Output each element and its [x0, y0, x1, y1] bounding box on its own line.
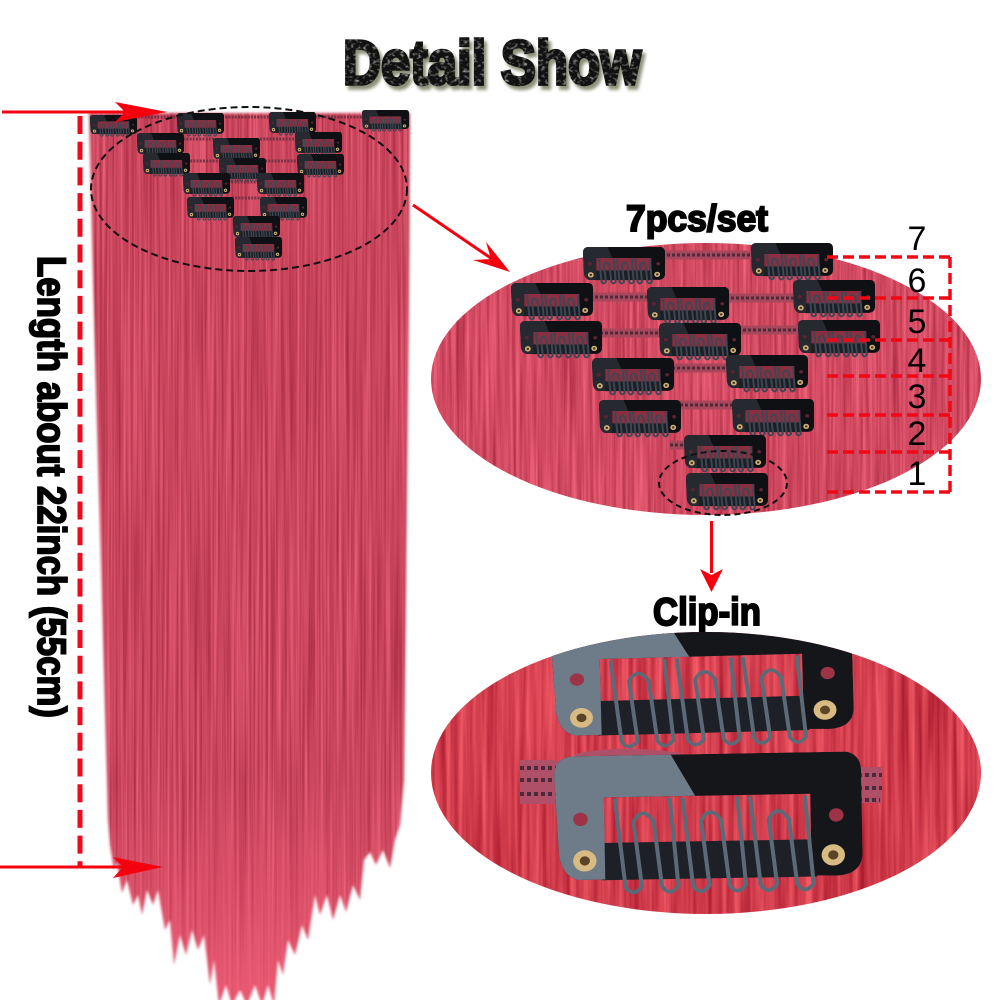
- weft stitching rows: [573, 250, 838, 450]
- length label: Length about 22inch (55cm): [29, 256, 73, 718]
- lower clip: [554, 751, 863, 894]
- heading 7pcs/set: 7pcs/set: [626, 198, 768, 239]
- layer numbers: 5: [908, 303, 926, 341]
- weft stitching on main hair: [135, 117, 362, 198]
- panel: 7 pieces detail ellipse: [425, 238, 990, 520]
- title: Detail Show: [346, 33, 645, 102]
- layer numbers: [908, 220, 926, 493]
- layer numbers: 7: [908, 220, 926, 258]
- top red arrow: [2, 102, 167, 122]
- bottom red arrow: [0, 857, 163, 878]
- dashed ellipse highlighting clips: [91, 107, 407, 271]
- layer numbers: 6: [908, 262, 926, 300]
- numbered layer bracket: [827, 257, 950, 492]
- clips in detail: [511, 243, 880, 509]
- upper clip: [552, 632, 854, 748]
- arrow down to clip-in detail: [700, 521, 723, 592]
- layer numbers: 1: [908, 455, 926, 493]
- layer numbers: 2: [908, 415, 926, 453]
- layer numbers: 3: [908, 378, 926, 416]
- weft patches: [520, 753, 882, 800]
- heading clip-in: Clip-in: [653, 591, 761, 634]
- dashed ellipse around bottom clip: [659, 451, 787, 515]
- panel: clip-in detail ellipse: [431, 632, 981, 914]
- layer numbers: 4: [908, 342, 926, 380]
- title: Detail Show: [343, 29, 642, 98]
- arrow to 7pcs detail: [413, 205, 510, 272]
- hair clips on main hair: [90, 110, 409, 260]
- main hair extension photo: [87, 110, 412, 1000]
- vertical length dashed line: [78, 116, 82, 866]
